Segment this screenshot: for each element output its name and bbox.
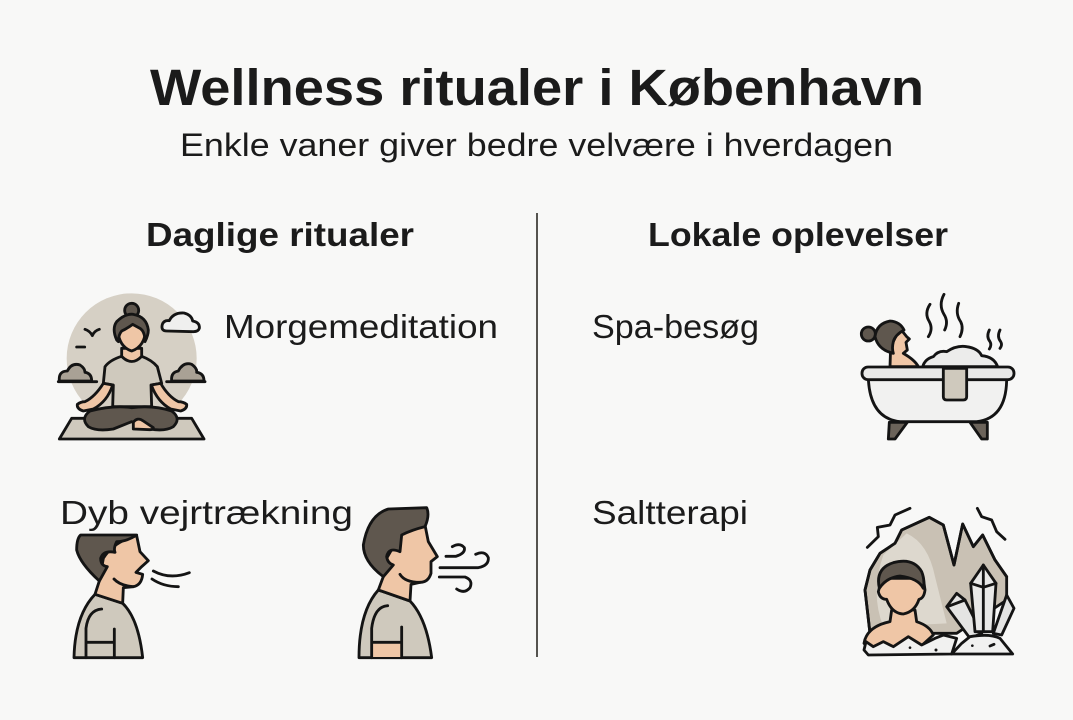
subtitle: Enkle vaner giver bedre velvære i hverdagen [180,127,893,163]
heading: Daglige ritualer: Daglige ritualer [146,216,414,253]
icon: salt cave with person and crystals [864,508,1014,655]
icon: person breathing out [359,508,488,658]
label: Spa-besøg: Spa-besøg [592,308,759,345]
title: Wellness ritualer i København [150,59,924,116]
label: Dyb vejrtrækning: Dyb vejrtrækning [60,494,353,531]
heading: Lokale oplevelser: Lokale oplevelser [648,216,948,253]
label: Saltterapi: Saltterapi [592,494,748,531]
icon: woman in bathtub [861,294,1014,439]
label: Morgemeditation: Morgemeditation [224,308,498,345]
icon: meditating woman [58,293,205,439]
icon: person breathing in [74,535,189,658]
